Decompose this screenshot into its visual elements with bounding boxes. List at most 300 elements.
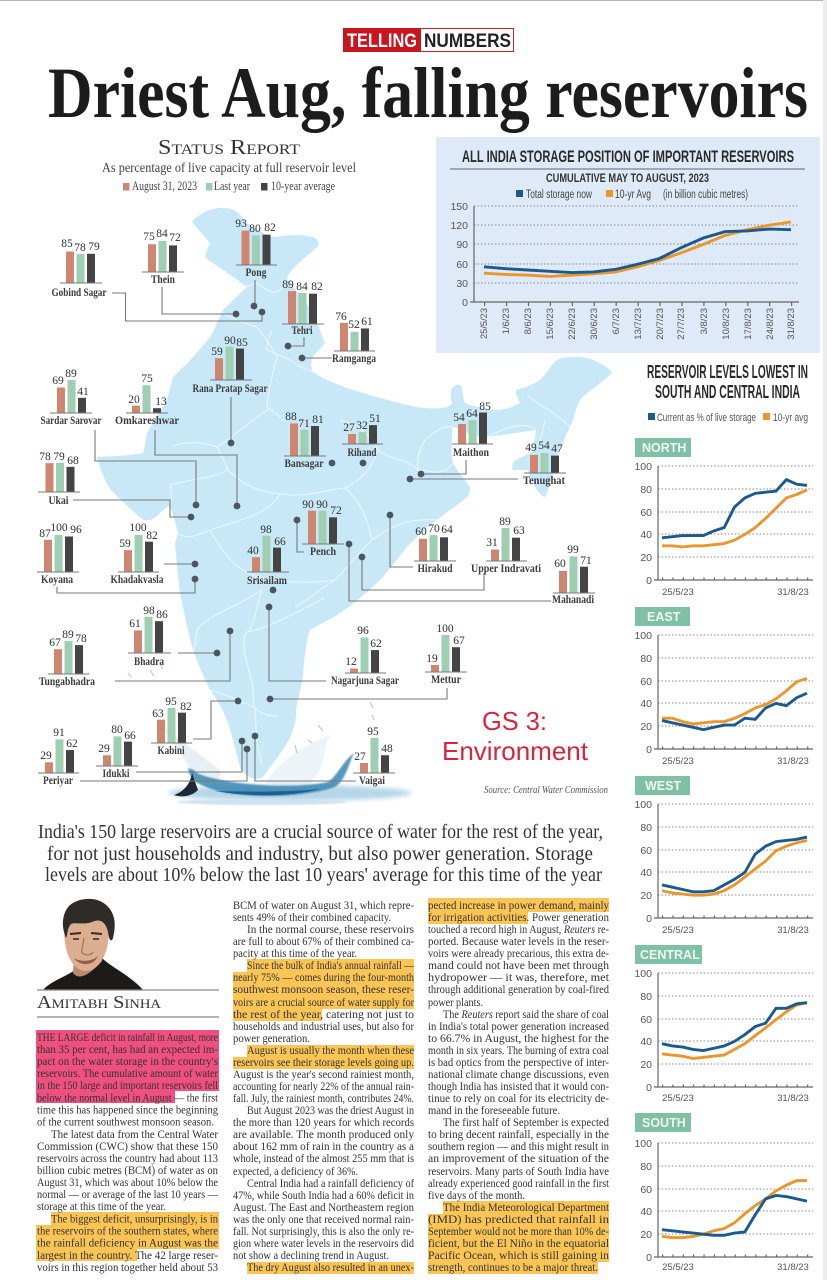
bars: Upper Indravati: 89 [499, 516, 511, 528]
chart: Central: 20 [640, 1059, 652, 1071]
bars: Srisailam: 98 [260, 524, 272, 536]
line chart: storage: 6/7/23 [611, 308, 622, 334]
bars: Srisailam [247, 524, 289, 587]
article column 2: power generation. [233, 1031, 310, 1045]
bars: Koyana [37, 522, 82, 586]
chart: West: WEST [645, 779, 681, 793]
chart: East: 100 [634, 630, 652, 642]
chart: East: 20 [640, 721, 652, 733]
bars: Vaigai: Vaigai [359, 775, 386, 787]
bars: Vaigai [353, 726, 395, 787]
article column 3: (IMD) has predicted that rainfall in [428, 1212, 609, 1226]
article column 1: Commission (CWC) show that these 150 [37, 1139, 218, 1153]
bars: Pench: Pench [310, 546, 337, 558]
chart: South: 25/5/23 [662, 1262, 694, 1273]
bars: Pong [235, 218, 277, 279]
chart: Central: CENTRAL [640, 948, 700, 962]
chart: Central: 31/8/23 [777, 1093, 809, 1104]
bars: Gobind Sagar [52, 238, 106, 299]
bars: Kabini: Kabini [158, 745, 185, 757]
article column 1: THE LARGE deficit in rainfall in August, more [37, 1030, 218, 1044]
article column 3: The India Meteorological Department [443, 1200, 610, 1214]
article column 3: mand could not have been met through [428, 958, 609, 972]
chart legend: Total storage now [526, 189, 593, 201]
chart: Central: 100 [634, 968, 652, 980]
bars: Mahanadi: Mahanadi [552, 594, 595, 606]
bars: Hirakud: 60 [415, 526, 427, 538]
bars: Sardar Sarovar: Sardar Sarovar [40, 415, 102, 427]
chart: North: 20 [640, 552, 652, 564]
bars: Bansagar: 81 [312, 414, 324, 426]
bars: Omkareshwar: 75 [141, 373, 153, 385]
article column 1: largest in the country. The 42 large reser- [37, 1248, 218, 1262]
article column 3: southern region — and this might result in [428, 1139, 609, 1153]
status report legend: Last year [214, 179, 251, 193]
bars: Rihand [342, 413, 383, 459]
article column 2: nearly 75% — comes during the four-month [233, 970, 414, 984]
line chart: storage: 31/8/23 [786, 308, 797, 340]
bars: Khadakvasla: Khadakvasla [110, 574, 164, 586]
bars: Tenughat: 47 [551, 443, 563, 455]
chart: East: 60 [640, 676, 652, 688]
bars: Koyana: Koyana [41, 574, 73, 586]
line chart: storage: 150 [450, 201, 468, 213]
article column 2: gion where water levels in the reservoirs did [233, 1236, 414, 1250]
bars: Rana Pratap Sagar [192, 335, 268, 395]
line chart: storage: 20/7/23 [655, 308, 666, 340]
bars: Vaigai: 95 [367, 726, 379, 738]
standfirst [38, 822, 603, 886]
chart: South: 100 [634, 1138, 652, 1150]
bars: Omkareshwar: 13 [155, 396, 167, 408]
bars: Idukki: 66 [124, 730, 136, 742]
article column 2: But August 2023 was the driest August in [247, 1103, 414, 1117]
bars: Bhadra: 61 [129, 618, 141, 630]
status report heading [102, 135, 356, 175]
line chart: storage: 22/6/23 [567, 308, 578, 340]
bars: Bhadra: 98 [143, 605, 155, 617]
chart: Central: 25/5/23 [662, 1093, 694, 1104]
chart: North: 0 [646, 575, 652, 587]
bars: Rana Pratap Sagar: Rana Pratap Sagar [192, 383, 268, 395]
status report legend: 10-year average [271, 179, 335, 193]
bars: Ukai: 68 [67, 455, 79, 467]
article column 3: power plants. [428, 995, 483, 1009]
bars: Srisailam: 40 [247, 545, 259, 557]
bars: Pong: 82 [264, 222, 276, 234]
bars: Hirakud [414, 523, 456, 575]
bars: Rihand: 27 [343, 422, 355, 434]
bars: Tungabhadra: Tungabhadra [39, 676, 95, 688]
bars: Nagarjuna Sagar: 96 [357, 625, 369, 637]
article column 2: August is usually the month when these [247, 1043, 414, 1057]
bars: Maithon: 85 [479, 401, 491, 413]
chart: South [634, 1113, 813, 1273]
bars: Sardar Sarovar: 69 [52, 375, 64, 387]
status report heading: As percentage of live capacity at full reservoir level [102, 160, 356, 175]
right panel legend: Current as % of live storage [657, 412, 756, 424]
line chart: storage: 30/6/23 [589, 308, 600, 340]
bars: Tehri: Tehri [292, 325, 313, 337]
article column 3: to bring decent rainfall, especially in the [428, 1127, 609, 1141]
bars: Sardar Sarovar [40, 368, 102, 427]
bars: Ramganga: 76 [335, 311, 347, 323]
bars: Idukki: Idukki [102, 768, 130, 780]
bars: Tenughat [523, 440, 566, 487]
article column 2: In the normal course, these reservoirs [247, 922, 414, 936]
annotation: GS 3 Environment: GS 3: [482, 706, 547, 736]
article column 1: The latest data from the Central Water [51, 1127, 218, 1141]
chart: West: 40 [640, 867, 652, 879]
bars: Maithon: Maithon [453, 447, 490, 459]
section badge: Telling Numbers [343, 28, 514, 52]
article column 3: to 66.7% in August, the highest for the [428, 1031, 609, 1045]
article column 3: strength, continues to be a major threat. [428, 1260, 598, 1274]
bars: Koyana: 100 [50, 522, 68, 534]
line chart: storage: 30 [456, 278, 468, 290]
article column 3: ported. Because water levels in the reser- [428, 934, 609, 948]
standfirst: India's 150 large reservoirs are a crucial source of water for the rest of the year, [38, 822, 603, 843]
bars: Pong: 80 [249, 223, 261, 235]
chart: West: 60 [640, 845, 652, 857]
article column 2: sents 49% of their combined capacity. [233, 910, 391, 924]
article column 3: The Reuters report said the share of coal [443, 1007, 610, 1021]
bars: Periyar [38, 727, 79, 787]
chart: Central: 60 [640, 1014, 652, 1026]
bars: Ramganga: 61 [361, 316, 373, 328]
chart: East: 25/5/23 [662, 756, 694, 767]
line chart: storage: 13/7/23 [633, 308, 644, 340]
article column 1: the rainfall deficiency in August was the [37, 1236, 218, 1250]
bars: Gobind Sagar: 78 [74, 242, 86, 254]
bars: Mettur: 19 [426, 653, 438, 665]
bars: Sardar Sarovar: 89 [65, 368, 77, 380]
bars: Thein: Thein [151, 274, 176, 286]
status report legend [123, 179, 335, 193]
bars: Vaigai: 48 [381, 743, 393, 755]
bars: Ramganga: 52 [348, 319, 360, 331]
chart: Central: 80 [640, 991, 652, 1003]
status report heading: Status Report [158, 135, 300, 159]
bars: Mettur: Mettur [431, 674, 461, 686]
bars: Rihand: 32 [356, 420, 368, 432]
article column 3: pected increase in power demand, mainly [428, 898, 609, 912]
line chart: storage: 90 [456, 239, 468, 251]
bars: Bhadra [128, 605, 171, 668]
chart legend [516, 189, 748, 201]
bars: Idukki: 29 [98, 743, 110, 755]
panel: all India storage chart [436, 137, 820, 353]
article column 3: September would not be more than 10% de- [428, 1224, 609, 1238]
bars: Khadakvasla: 59 [119, 538, 131, 550]
bars: Pench [302, 499, 344, 558]
line chart: storage: 1/6/23 [501, 308, 512, 334]
article column 3: is bad optics from the perspective of inter- [428, 1055, 609, 1069]
article column 3: touched a record high in August, Reuters re- [428, 922, 609, 936]
bars: Pench: 90 [316, 499, 328, 511]
bars: Mahanadi: 99 [567, 544, 579, 556]
bars: Nagarjuna Sagar: 12 [345, 656, 357, 668]
bars: Periyar: 91 [53, 727, 65, 739]
bars: Rana Pratap Sagar: 90 [224, 335, 236, 347]
article column 2: households and industrial uses, but also for [233, 1019, 414, 1033]
article column 2: expected, a deficiency of 36%. [233, 1164, 358, 1178]
bars: Khadakvasla: 82 [146, 530, 158, 542]
chart: West: 0 [646, 913, 652, 925]
bars: Tehri: 84 [296, 281, 308, 293]
bars: Periyar: Periyar [43, 775, 73, 787]
bars: Pench: 90 [302, 499, 314, 511]
bars: Bansagar: 71 [298, 418, 310, 430]
bars: Omkareshwar [115, 373, 179, 427]
article column 2: voirs are a crucial source of water supply for [233, 995, 414, 1009]
article column 3: month in six years. The burning of extra coal [428, 1043, 610, 1057]
article column 1: the reservoirs of the southern states, where [37, 1224, 218, 1238]
article column 1: reservoirs. The cumulative amount of water [37, 1066, 218, 1080]
bars: Upper Indravati: 63 [513, 525, 525, 537]
chart: West: 20 [640, 890, 652, 902]
chart: West: 80 [640, 822, 652, 834]
line chart: storage [450, 201, 800, 340]
section badge: Telling Numbers: TELLING [347, 31, 417, 52]
article column 1 [37, 1030, 219, 1274]
chart: South: 60 [640, 1184, 652, 1196]
article column 2: the more than 120 years for which records [233, 1115, 414, 1129]
article column 2: are available. The month produced only [233, 1127, 414, 1141]
annotation: GS 3 Environment: Environment [442, 736, 589, 766]
article column 2: not show a declining trend in August. [233, 1248, 389, 1262]
line chart: storage: 27/7/23 [676, 308, 687, 340]
bars: Hirakud: Hirakud [418, 563, 453, 575]
bars: Tehri [282, 279, 324, 337]
bars: Mettur [425, 623, 467, 686]
article column 2: pacity at this time of the year. [233, 946, 357, 960]
chart: North: 100 [634, 461, 652, 473]
source note: Source: Central Water Commission [484, 784, 608, 796]
bars: Koyana: 96 [70, 524, 82, 536]
bars: Kabini: 95 [165, 696, 177, 708]
chart: Central [634, 945, 813, 1104]
article column 3: an improvement of the situation of the [428, 1151, 609, 1165]
bars: Idukki: 80 [111, 724, 123, 736]
chart: North [634, 438, 813, 598]
article column 1: in the 150 large and important reservoirs fell [37, 1078, 219, 1092]
bars: Tenughat: Tenughat [523, 475, 565, 487]
article column 3: through additional generation by coal-fired [428, 982, 609, 996]
bars: Upper Indravati [471, 516, 542, 575]
bars: Thein: 72 [169, 232, 181, 244]
article column 3: reservoirs. Many parts of South India have [428, 1164, 609, 1178]
line chart: storage: 8/6/23 [523, 308, 534, 334]
article column 1: reservoirs across the country had about 113 [37, 1151, 218, 1165]
chart: South: 40 [640, 1206, 652, 1218]
chart: South: 20 [640, 1229, 652, 1241]
article column 2: fall. Not surprisingly, this is also the only re- [233, 1224, 414, 1238]
bars: Gobind Sagar: 79 [88, 241, 100, 253]
bars: Pong: 93 [235, 218, 247, 230]
article column 1: of the current southwest monsoon season. [37, 1115, 214, 1129]
article column 2: Central India had a rainfall deficiency of [247, 1176, 414, 1190]
article column 3: ficient, but the El Niño in the equatorial [428, 1236, 610, 1250]
bars: Ramganga: Ramganga [332, 353, 376, 365]
bars: Tungabhadra [39, 629, 95, 688]
bars: Nagarjuna Sagar: 62 [370, 638, 382, 650]
bars: Khadakvasla [110, 522, 164, 586]
article column 2 [233, 898, 415, 1274]
bars: Bhadra: 86 [156, 609, 168, 621]
article column 3: national climate change discussions, even [428, 1067, 609, 1081]
bars: Ukai: Ukai [48, 495, 69, 507]
article column 3: already experienced good rainfall in the first [428, 1176, 610, 1190]
chart: Central: 0 [646, 1082, 652, 1094]
chart: East: 31/8/23 [777, 756, 809, 767]
chart: West: 31/8/23 [777, 925, 809, 936]
standfirst: for not just households and industry, but also power generation. Storage [47, 844, 593, 865]
article column 1: billion cubic metres (BCM) of water as on [37, 1163, 218, 1177]
chart: West: 100 [634, 799, 652, 811]
bars: Pong: Pong [246, 267, 267, 279]
bars: Mahanadi: 71 [580, 555, 592, 567]
bars: Tungabhadra: 78 [75, 633, 87, 645]
bars: Tenughat: 54 [538, 440, 550, 452]
line chart: storage: 17/8/23 [743, 308, 754, 340]
bars: Ukai: 79 [53, 451, 65, 463]
chart: North: 80 [640, 484, 652, 496]
bars: Thein [142, 228, 184, 286]
annotation: GS 3 Environment [442, 706, 589, 766]
author name: Amitabh Sinha [37, 992, 162, 1012]
bars: Nagarjuna Sagar [331, 625, 399, 687]
bars: Nagarjuna Sagar: Nagarjuna Sagar [331, 675, 399, 687]
chart: East: 0 [646, 744, 652, 756]
chart: North: 40 [640, 529, 652, 541]
bars: Upper Indravati: 31 [486, 537, 498, 549]
bars: Omkareshwar: Omkareshwar [115, 415, 179, 427]
chart: East [634, 607, 813, 767]
article column 3: The first half of September is expected [443, 1115, 609, 1129]
bars: Mahanadi: 60 [554, 558, 566, 570]
article column 2: southwest monsoon season, these reser- [233, 982, 414, 996]
standfirst: levels are about 10% below the last 10 years' average for this time of the year [45, 865, 602, 886]
right panel heading [647, 361, 808, 402]
bars: Hirakud: 70 [428, 523, 440, 535]
article column 2: August. The East and Northeastern region [233, 1200, 414, 1214]
article column 3: voirs were already precarious, this extra de- [428, 946, 609, 960]
bars: Ukai: 78 [39, 451, 51, 463]
bars: Gobind Sagar: Gobind Sagar [52, 287, 106, 299]
bars: Bansagar [284, 411, 326, 470]
article column 3: tinue to rely on coal for its electricity de- [428, 1091, 609, 1105]
article column 1: voirs in this region together held about 53 [37, 1260, 218, 1274]
article column 2: Since the bulk of India's annual rainfall — [247, 958, 415, 972]
chart: East: 80 [640, 653, 652, 665]
chart: South: SOUTH [642, 1116, 686, 1130]
line chart: storage: 24/8/23 [765, 308, 776, 340]
bars: Bansagar: 88 [285, 411, 297, 423]
article column 3: hydropower — it was, therefore, met [428, 970, 610, 984]
article column 2: August is the year's second rainiest month, [233, 1067, 414, 1081]
bars: Tenughat: 49 [525, 442, 537, 454]
bars: Omkareshwar: 20 [128, 394, 140, 406]
line chart: storage: 120 [450, 220, 468, 232]
chart: West [634, 776, 813, 936]
article column 2: fall. July, the rainiest month, contributes 24%. [233, 1091, 414, 1105]
chart: East: EAST [647, 610, 681, 624]
author illustration [43, 899, 143, 990]
article column 1: August 31, which was about 10% below the [37, 1175, 218, 1189]
article column 3: Pacific Ocean, which is still gaining in [428, 1248, 609, 1262]
bars: Tungabhadra: 89 [62, 629, 74, 641]
bars: Tungabhadra: 67 [49, 637, 61, 649]
article column 2: BCM of water on August 31, which repre- [233, 898, 414, 912]
bars: Periyar: 62 [66, 738, 78, 750]
right panel legend: 10-yr avg [773, 412, 808, 424]
article column 3: five days of the month. [428, 1188, 525, 1202]
bars: Thein: 75 [143, 231, 155, 243]
article column 3 [428, 898, 610, 1274]
bars: Rihand: 51 [369, 413, 381, 425]
chart: North: 60 [640, 507, 652, 519]
chart: South: 31/8/23 [777, 1262, 809, 1273]
article column 1: The biggest deficit, unsurprisingly, is in [51, 1212, 218, 1226]
bars: Maithon: 64 [466, 408, 478, 420]
bars: Vaigai: 27 [354, 751, 366, 763]
bars: Upper Indravati: Upper Indravati [471, 563, 542, 575]
article column 2: accounting for nearly 22% of the annual rain- [233, 1079, 414, 1093]
bars: Koyana: 87 [39, 528, 51, 540]
bars: Pench: 72 [330, 505, 342, 517]
bars: Rana Pratap Sagar: 59 [211, 346, 223, 358]
article column 2: was the only one that received normal rain- [233, 1212, 414, 1226]
chart: North: NORTH [642, 441, 686, 455]
bars: Rihand: Rihand [348, 447, 377, 459]
line chart: storage: 0 [462, 297, 468, 309]
article column 1: pact on the water storage in the country's [37, 1054, 218, 1068]
map of India [97, 208, 612, 779]
line chart: storage: 60 [456, 259, 468, 271]
article column 2: whole, instead of the almost 255 mm that is [233, 1151, 414, 1165]
article column 1: than 35 per cent, has had an expected im- [37, 1042, 218, 1056]
bars: Bansagar: Bansagar [284, 458, 324, 470]
bars: Bhadra: Bhadra [134, 656, 164, 668]
article column 3: in India's total power generation increased [428, 1019, 609, 1033]
article column 2: reservoirs see their storage levels going up. [233, 1055, 414, 1069]
line chart: storage: 10/8/23 [721, 308, 732, 340]
chart: Central: 40 [640, 1036, 652, 1048]
bars: Srisailam: 66 [274, 536, 286, 548]
article column 3: for irrigation activities. Power generation [428, 910, 609, 924]
chart: East: 40 [640, 698, 652, 710]
chart legend: (in billion cubic metres) [663, 189, 748, 201]
article column 1: below the normal level in August — the first [37, 1090, 219, 1104]
article column 2: The dry August also resulted in an unex- [247, 1260, 414, 1274]
bars: Hirakud: 64 [441, 524, 453, 536]
article column 3: though India has insisted that it would con- [428, 1079, 609, 1093]
bars: Kabini: 63 [152, 708, 164, 720]
chart: South: 80 [640, 1161, 652, 1173]
bars: Maithon [452, 401, 493, 459]
bars: Maithon: 54 [453, 412, 465, 424]
bars: Tehri: 82 [311, 281, 323, 293]
bars: Khadakvasla: 100 [129, 522, 147, 534]
bars: Gobind Sagar: 85 [61, 238, 73, 250]
article column 3: mand in the foreseeable future. [428, 1103, 560, 1117]
article column 1: normal — or average of the last 10 years — [37, 1187, 219, 1201]
bars: Mettur: 100 [436, 623, 454, 635]
water splash [128, 664, 412, 805]
chart: South: 0 [646, 1252, 652, 1264]
bars: Ukai [38, 451, 80, 507]
